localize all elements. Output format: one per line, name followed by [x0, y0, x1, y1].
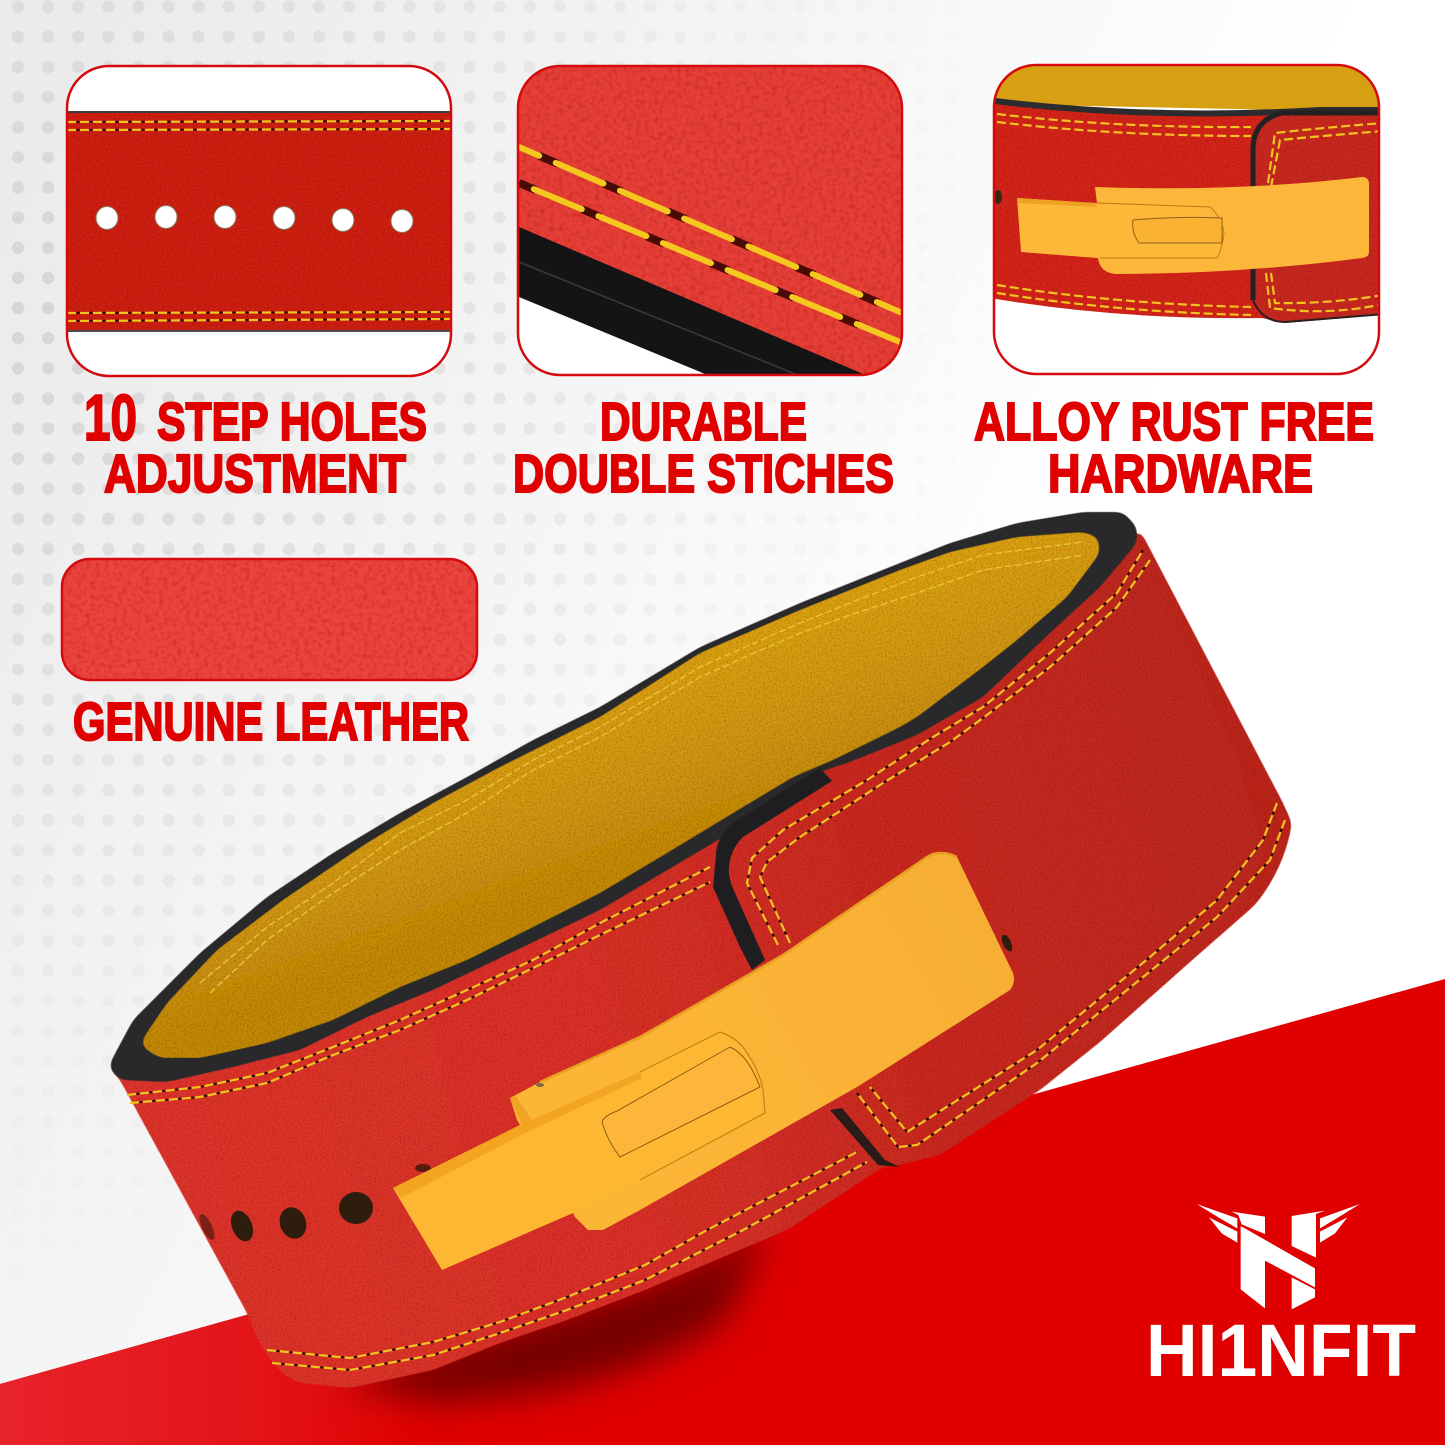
belt main photo — [110, 512, 1292, 1388]
logo mark — [1197, 1204, 1360, 1309]
heading: durable double stiches: DOUBLE STICHES — [513, 444, 894, 504]
lever back plate — [510, 853, 1014, 1230]
tab black outline — [713, 768, 900, 1167]
panel: genuine leather texture — [62, 559, 477, 680]
lower stitching left — [267, 1152, 867, 1370]
holes — [96, 206, 413, 232]
small lever: front bar — [1017, 198, 1098, 258]
lever bar bevel — [393, 1072, 642, 1198]
heading: durable double stiches — [513, 392, 894, 504]
panel: step holes photo — [60, 66, 460, 376]
logo wordmark: HI1NFIT — [1146, 1309, 1416, 1392]
heading: 10 step holes adjustment — [84, 381, 427, 504]
lever screw — [536, 1083, 544, 1087]
heading: durable double stiches: DURABLE — [600, 392, 807, 452]
lever small bevel — [510, 1096, 532, 1125]
belt yellow interior — [142, 532, 1100, 1058]
belt outer red band — [110, 530, 1292, 1388]
belt black rim — [110, 512, 1137, 1082]
small lever: back plate — [1095, 177, 1369, 274]
heading: alloy rust free hardware: HARDWARE — [1048, 444, 1313, 504]
logo: HI1NFIT — [1146, 1204, 1416, 1392]
heading: alloy rust free hardware — [974, 392, 1374, 504]
front stitching right — [747, 550, 1150, 945]
heading: genuine leather: GENUINE LEATHER — [73, 692, 469, 752]
lower stitching right — [857, 803, 1285, 1147]
lever top edge highlight — [540, 853, 957, 1082]
heading: 10 step holes adjustment: ADJUSTMENT — [104, 444, 406, 504]
panel: double stitches photo — [518, 66, 902, 376]
red floor shape — [0, 979, 1445, 1445]
front stitching left — [127, 867, 710, 1103]
lever front bar — [393, 1032, 765, 1270]
panel: hardware photo — [990, 60, 1390, 374]
heading: 10 step holes adjustment: 10 — [84, 381, 137, 454]
belt adjustment holes — [197, 933, 1014, 1245]
interior stitching — [200, 542, 1083, 993]
background — [0, 0, 957, 1384]
heading: 10 step holes adjustment: STEP HOLES — [157, 392, 427, 452]
lever slot — [602, 1032, 765, 1180]
